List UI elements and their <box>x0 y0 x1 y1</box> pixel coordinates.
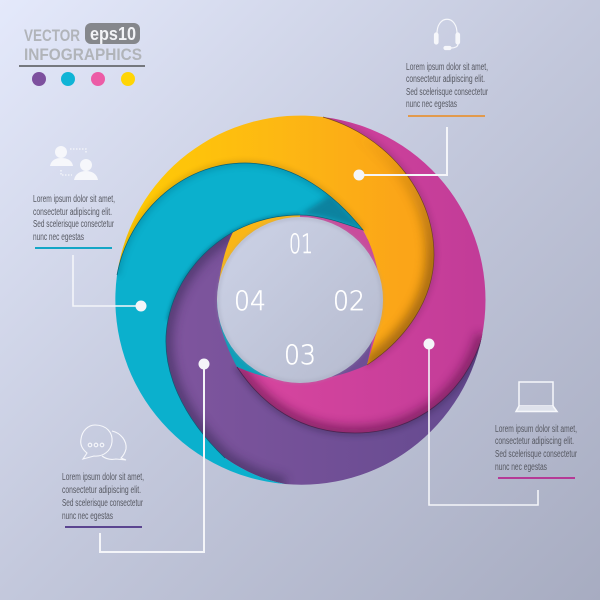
underline 02 <box>498 477 575 479</box>
number 04: 04 <box>234 286 266 317</box>
icon: headset <box>434 19 460 50</box>
underline 04 <box>35 247 112 249</box>
text block 03 <box>62 472 144 522</box>
text block 03: nunc nec egestas <box>62 511 113 522</box>
sliver: yellow <box>217 215 300 300</box>
underline 03 <box>65 526 142 528</box>
text block 04: Lorem ipsum dolor sit amet, <box>33 194 115 205</box>
text block 04: consectetur adipiscing elit. <box>33 207 112 218</box>
segment 03: purple <box>166 215 483 485</box>
connector 02 <box>424 338 538 505</box>
connector 04 <box>73 255 146 312</box>
sliver: magenta <box>300 215 378 272</box>
underline 01 <box>408 115 485 117</box>
text block 03: Lorem ipsum dolor sit amet, <box>62 472 144 483</box>
text block 01: Lorem ipsum dolor sit amet, <box>406 62 488 73</box>
text block 02 <box>495 424 577 473</box>
header: vector eps10 infographics: VECTOR <box>24 26 80 45</box>
connector 01 <box>354 127 447 180</box>
icon: laptop <box>516 382 557 412</box>
swirl donut chart <box>115 116 486 485</box>
sliver: teal <box>217 301 272 378</box>
text block 04 <box>33 194 115 243</box>
text block 03: Sed scelerisque consectetur <box>62 498 143 509</box>
header: vector eps10 infographics: eps10 <box>90 24 136 44</box>
segment 04: teal <box>115 163 363 484</box>
text block 01: consectetur adipiscing elit. <box>406 74 485 85</box>
center hole <box>217 217 383 383</box>
text block 01: Sed scelerisque consectetur <box>406 87 488 98</box>
number 03: 03 <box>284 340 316 371</box>
text block 01 <box>406 62 488 110</box>
connector 03 <box>100 358 210 552</box>
number 02: 02 <box>333 286 365 317</box>
segment 02: magenta <box>237 117 486 433</box>
text block 01: nunc nec egestas <box>406 99 457 110</box>
number 01: 01 <box>289 229 313 260</box>
icon: people <box>50 146 98 180</box>
text block 04: Sed scelerisque consectetur <box>33 219 114 230</box>
icon: chat bubbles <box>81 425 126 460</box>
segment 01: orange <box>117 116 434 365</box>
header: vector eps10 infographics <box>19 23 145 86</box>
text block 03: consectetur adipiscing elit. <box>62 485 141 496</box>
text block 04: nunc nec egestas <box>33 232 84 243</box>
header: vector eps10 infographics: INFOGRAPHICS <box>24 45 142 64</box>
text block 02: nunc nec egestas <box>495 462 547 473</box>
